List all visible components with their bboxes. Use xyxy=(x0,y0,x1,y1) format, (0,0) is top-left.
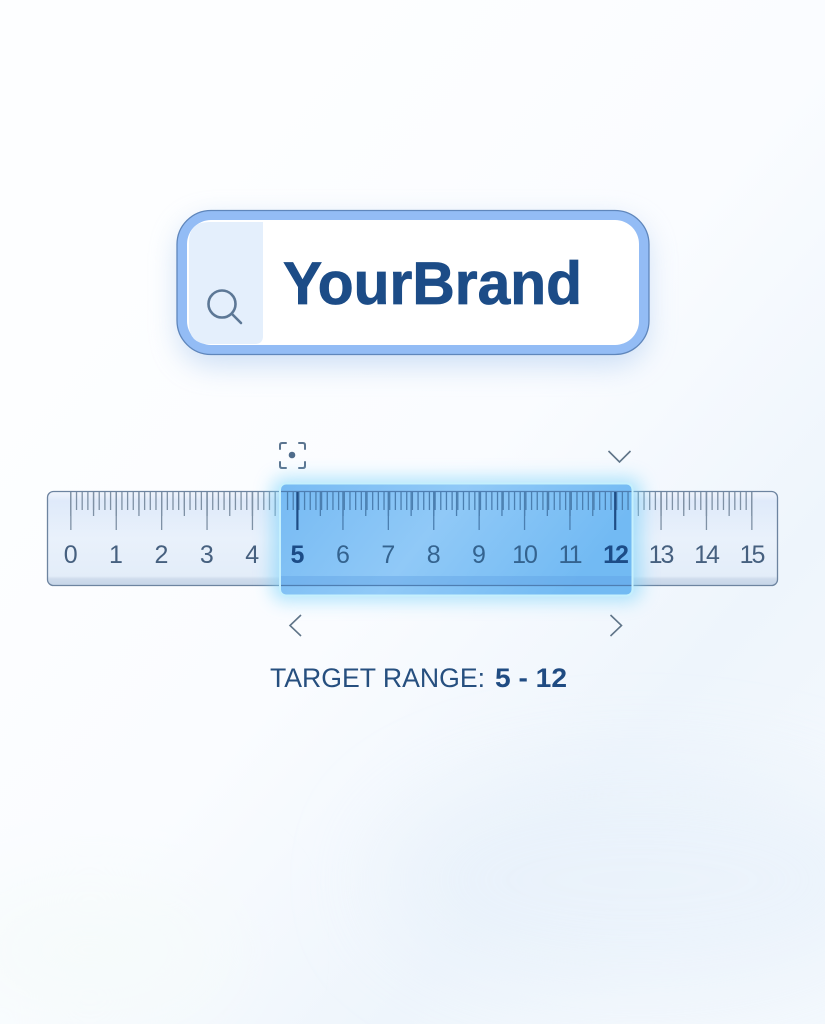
ruler numbers: 9 xyxy=(472,541,486,569)
search box shadow xyxy=(178,220,648,366)
icon: chevron down xyxy=(608,451,630,462)
search box xyxy=(177,210,649,366)
ruler numbers: 1 xyxy=(109,541,123,569)
ruler numbers: 5 xyxy=(291,541,305,569)
ruler numbers: 14 xyxy=(694,541,720,569)
ruler numbers: 0 xyxy=(64,541,78,569)
range start and end ticks xyxy=(297,492,615,530)
highlight lower shade xyxy=(281,576,632,586)
ruler xyxy=(48,492,778,586)
ruler numbers: 10 xyxy=(512,541,537,569)
highlight band xyxy=(280,484,632,596)
highlight edge lines xyxy=(281,492,632,586)
search icon panel xyxy=(189,222,263,344)
search box inner field xyxy=(187,220,639,345)
search box frame xyxy=(177,210,649,354)
ruler numbers: 3 xyxy=(200,541,214,569)
ruler numbers: 8 xyxy=(427,541,441,569)
highlight ticks xyxy=(287,501,632,511)
ruler numbers: 4 xyxy=(245,541,259,569)
ruler numbers: 13 xyxy=(649,541,673,569)
target range highlight xyxy=(272,478,641,601)
ruler ticks xyxy=(70,501,753,511)
icon: chevron left xyxy=(290,615,301,636)
ruler numbers: 15 xyxy=(740,541,764,569)
target range label: TARGET RANGE: xyxy=(270,663,485,693)
icon: focus target xyxy=(280,443,305,468)
ruler numbers: 7 xyxy=(381,541,395,569)
highlight glow xyxy=(272,478,641,601)
ruler numbers xyxy=(64,541,764,569)
icon: chevron right xyxy=(610,615,622,636)
target range label: 5 - 12 xyxy=(495,663,567,693)
ruler numbers: 2 xyxy=(155,541,168,569)
icon: magnifying glass xyxy=(208,290,241,323)
brand name: YourBrand xyxy=(283,250,582,317)
ruler numbers: 6 xyxy=(336,541,350,569)
ruler numbers: 11 xyxy=(559,541,582,569)
ruler numbers: 12 xyxy=(603,541,628,569)
ruler body xyxy=(48,492,778,586)
